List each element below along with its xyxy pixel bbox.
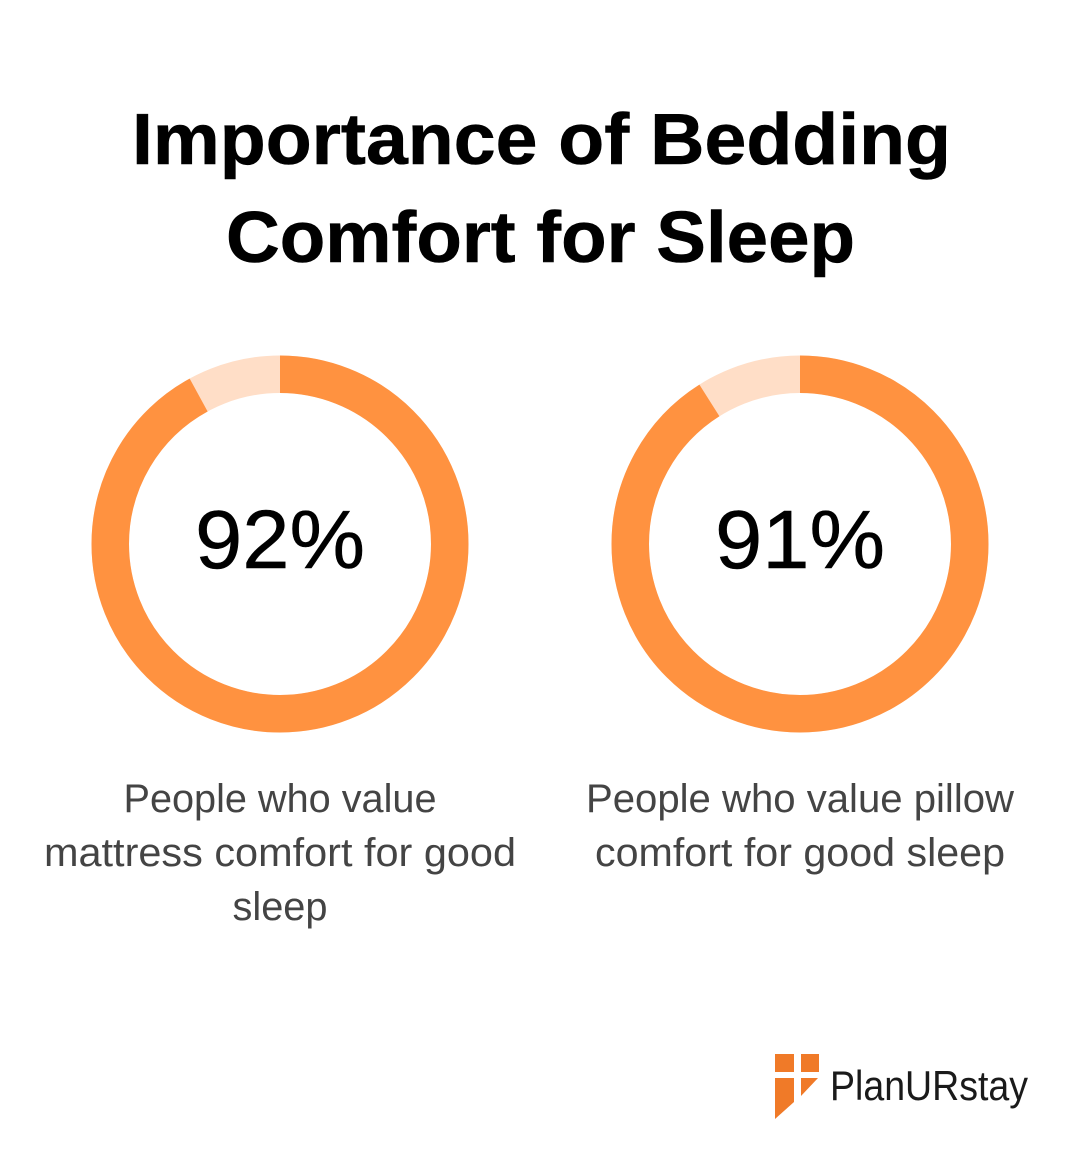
value: 91%: 91% bbox=[715, 493, 885, 586]
icon: logo mark bbox=[775, 1054, 819, 1119]
caption: mattress: mattress comfort for good bbox=[44, 831, 516, 875]
logo wordmark: PlanURstay bbox=[830, 1062, 1028, 1109]
title: Comfort for Sleep bbox=[226, 198, 855, 278]
title bbox=[132, 100, 951, 278]
caption: mattress: People who value bbox=[124, 777, 436, 821]
panel: pillow comfort bbox=[586, 374, 1014, 875]
caption: pillow: People who value pillow bbox=[586, 777, 1014, 821]
caption: pillow: comfort for good sleep bbox=[595, 831, 1005, 875]
caption: mattress: sleep bbox=[232, 885, 328, 929]
donut chart: 92% bbox=[110, 374, 450, 714]
caption: pillow bbox=[586, 777, 1014, 875]
logo: PlanURstay bbox=[775, 1054, 1028, 1119]
panel: mattress comfort bbox=[44, 374, 516, 929]
donut chart: 91% bbox=[630, 374, 970, 714]
caption: mattress bbox=[44, 777, 516, 929]
title: Importance of Bedding bbox=[132, 100, 951, 180]
value: 92%: 92% bbox=[195, 493, 365, 586]
